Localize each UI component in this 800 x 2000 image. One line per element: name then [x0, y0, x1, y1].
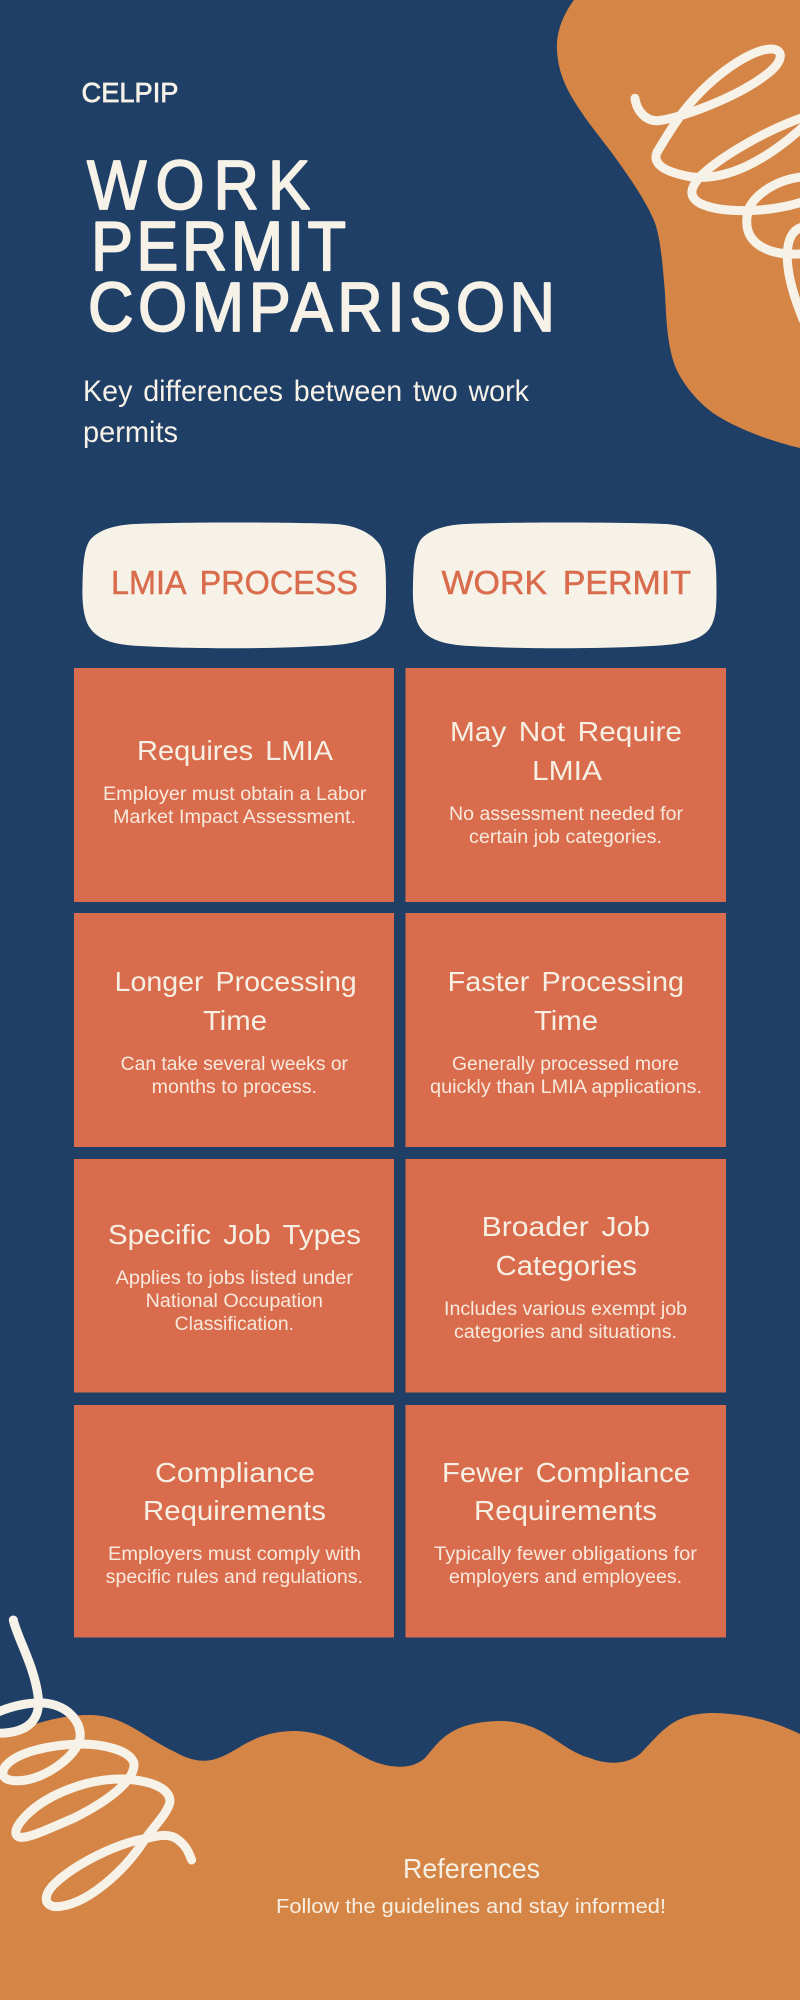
subtitle	[83, 375, 530, 449]
card: Broader Job Categories: Broader Job	[482, 1211, 650, 1242]
footer heading: References	[403, 1853, 540, 1884]
column header: LMIA process	[82, 522, 386, 648]
card: Specific Job Types: Specific Job Types	[108, 1219, 361, 1250]
card: Fewer Compliance Requirements: employers and employees.	[449, 1567, 682, 1588]
card: Broader Job Categories: Includes various exempt job	[444, 1299, 687, 1320]
card: Faster Processing Time: Generally processed more	[452, 1054, 679, 1075]
card: Faster Processing Time: quickly than LMIA applications.	[430, 1077, 702, 1098]
card: Compliance Requirements: Employers must comply with	[108, 1544, 361, 1565]
card: Broader Job Categories	[406, 1159, 726, 1392]
card: Faster Processing Time: Faster Processing	[448, 966, 684, 997]
card: Fewer Compliance Requirements: Fewer Compliance	[442, 1457, 690, 1488]
title: PERMIT	[91, 208, 346, 286]
card: Broader Job Categories: categories and situations.	[454, 1322, 677, 1343]
card: Fewer Compliance Requirements: Typically fewer obligations for	[434, 1544, 698, 1565]
card: Fewer Compliance Requirements	[406, 1405, 726, 1638]
card: Requires LMIA	[74, 668, 394, 902]
bottom orange wave	[0, 1713, 800, 2000]
card: Compliance Requirements	[74, 1405, 394, 1638]
card: Specific Job Types	[74, 1159, 394, 1392]
card: Longer Processing Time	[74, 913, 394, 1147]
card: May Not Require LMIA: certain job categories.	[469, 827, 662, 848]
card: Longer Processing Time: Time	[203, 1005, 267, 1036]
card: Specific Job Types: Applies to jobs listed under	[116, 1268, 354, 1289]
icon: bottom left squiggle	[0, 1620, 192, 1907]
card: May Not Require LMIA: No assessment needed for	[449, 804, 684, 825]
card: May Not Require LMIA: LMIA	[532, 755, 602, 786]
card: Longer Processing Time: months to process.	[152, 1077, 317, 1098]
column header: LMIA process: LMIA PROCESS	[111, 564, 358, 601]
card: Fewer Compliance Requirements: Requirements	[474, 1495, 657, 1526]
card: Specific Job Types: National Occupation	[146, 1291, 323, 1312]
card: Faster Processing Time: Time	[534, 1005, 598, 1036]
column header: work permit: WORK PERMIT	[442, 564, 691, 601]
footer text: Follow the guidelines and stay informed!	[276, 1896, 666, 1918]
brand label: CELPIP	[82, 77, 178, 108]
card: Longer Processing Time: Longer Processing	[115, 966, 357, 997]
card: Broader Job Categories: Categories	[496, 1250, 637, 1281]
icon: top right squiggle	[635, 49, 800, 320]
title	[87, 147, 555, 347]
card: Requires LMIA: Employer must obtain a Labor	[103, 784, 367, 805]
card: Faster Processing Time	[406, 913, 726, 1147]
card: Compliance Requirements: Requirements	[143, 1495, 326, 1526]
card: Longer Processing Time: Can take several weeks or	[121, 1054, 349, 1075]
top right orange blob	[557, 0, 800, 448]
title: COMPARISON	[88, 269, 555, 347]
card: May Not Require LMIA: May Not Require	[450, 716, 682, 747]
card: Requires LMIA: Requires LMIA	[137, 735, 333, 766]
column header: work permit	[413, 522, 716, 648]
subtitle: Key differences between two work	[83, 375, 530, 408]
subtitle: permits	[83, 416, 178, 449]
card: Specific Job Types: Classification.	[175, 1314, 294, 1335]
card: Compliance Requirements: specific rules and regulations.	[106, 1567, 363, 1588]
title: WORK	[87, 147, 310, 225]
card: Requires LMIA: Market Impact Assessment.	[113, 807, 356, 828]
card: Compliance Requirements: Compliance	[155, 1457, 315, 1488]
card: May Not Require LMIA	[406, 668, 726, 902]
